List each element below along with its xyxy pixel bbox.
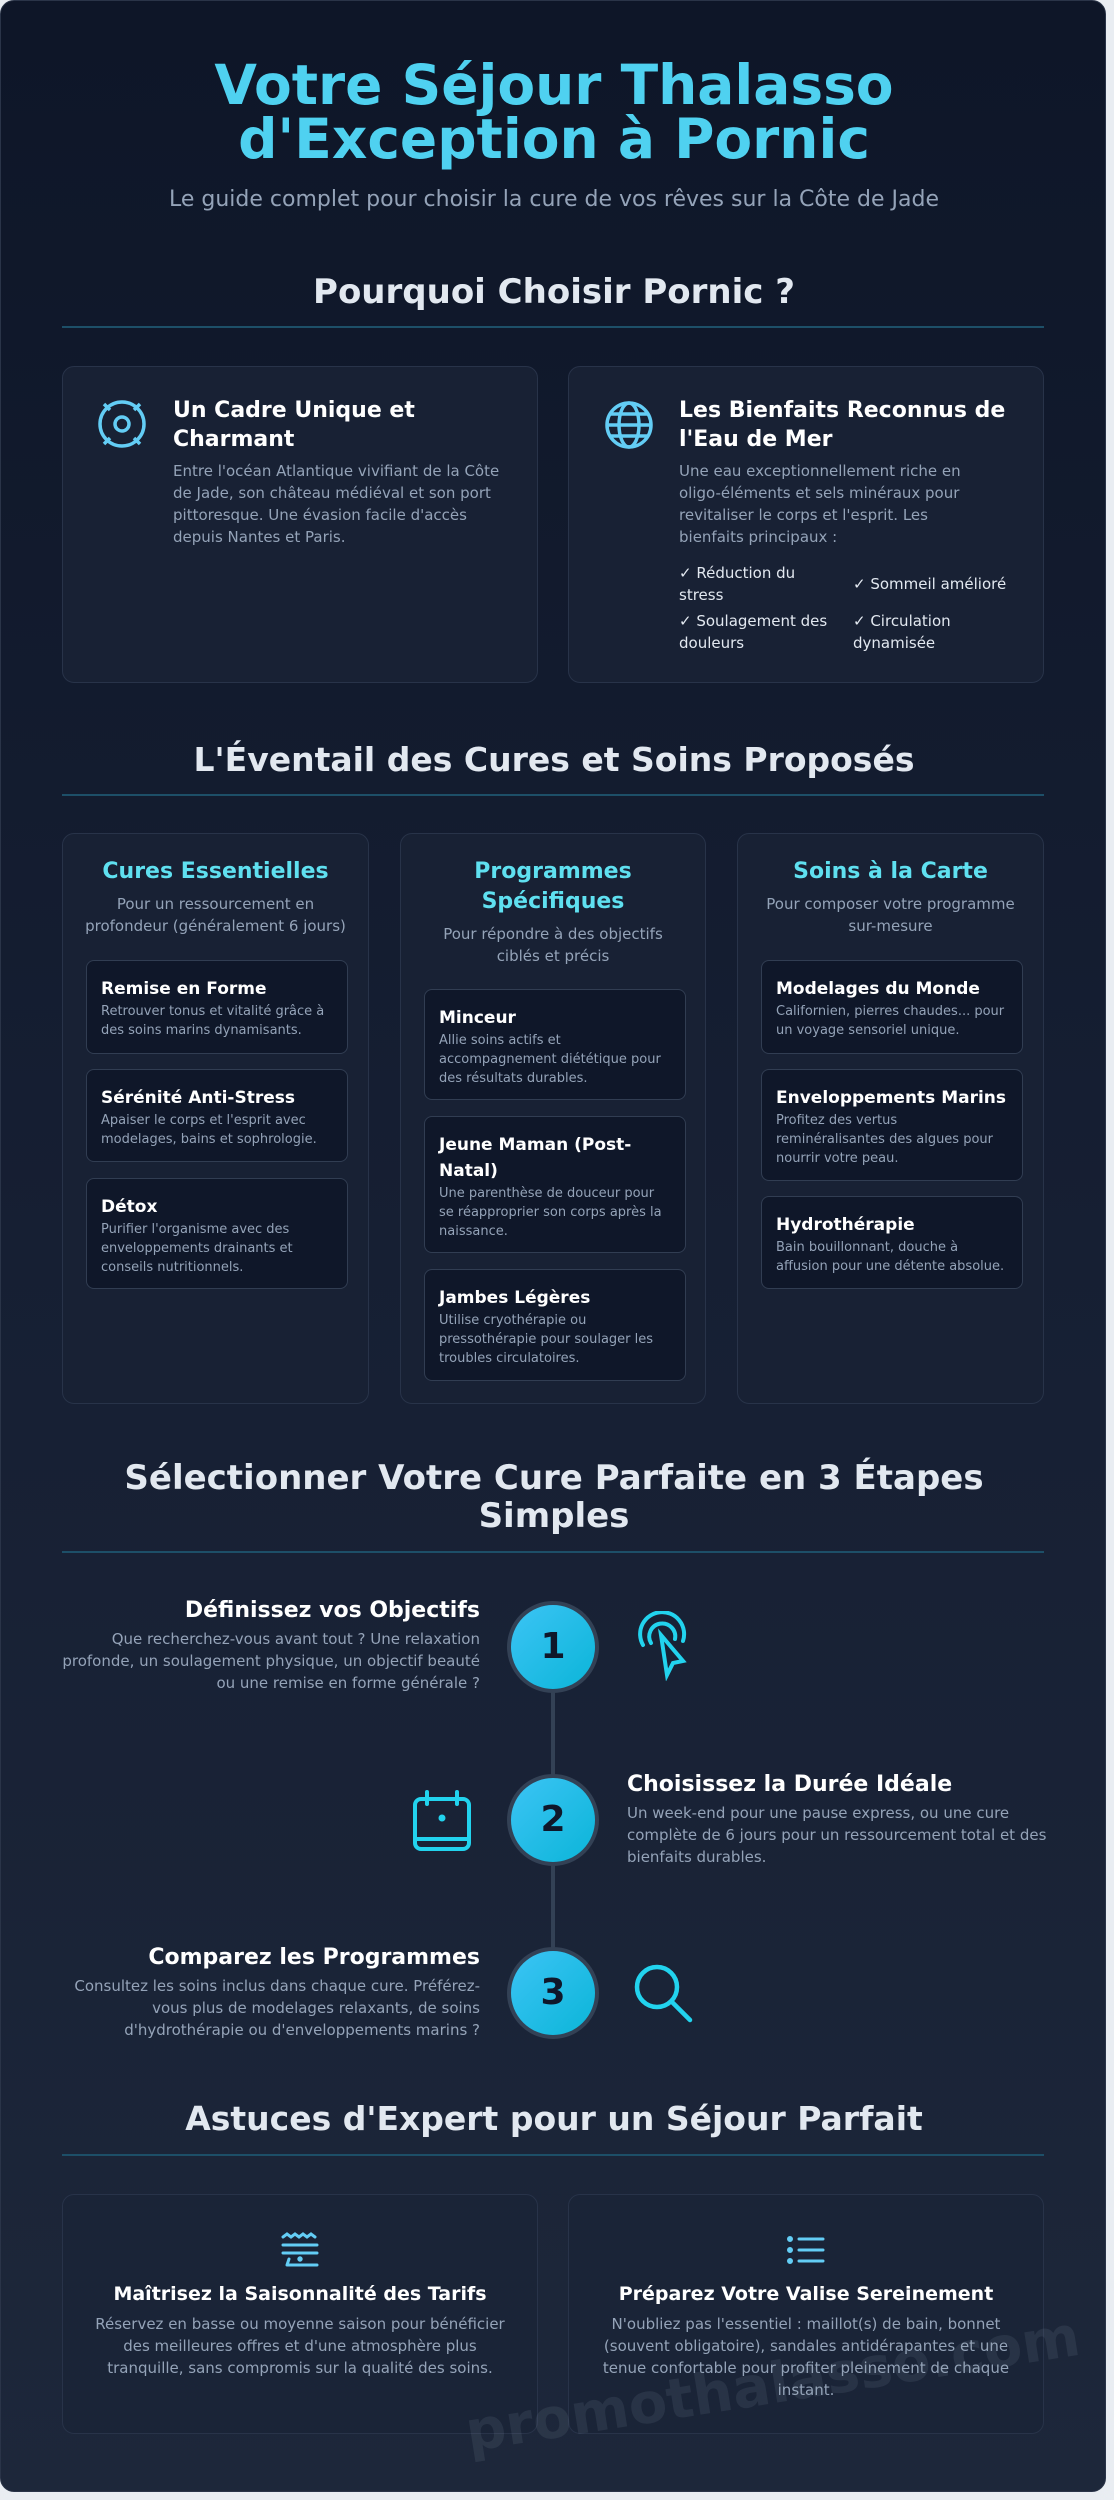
card: minceur: Minceur: [439, 1008, 516, 1028]
circle 3: 3: [540, 1972, 566, 2013]
icon: search: [634, 1964, 692, 2022]
heading: Eventail: L'Éventail des Cures et Soins Proposés: [194, 740, 914, 779]
subtitle: Le guide complet pour choisir la cure de vos rêves sur la Côte de Jade: [169, 187, 939, 212]
text block: Une eau exceptionnellement riche en oligo-éléments et sels minéraux pour revitaliser le corps et l'esprit. Les bienfaits principaux :: [679, 462, 961, 546]
icon: calendar: [413, 1790, 471, 1851]
icon: target: [98, 400, 146, 448]
card: remise en forme: Retrouver tonus et vitalité grâce à des soins marins dynamisants.: [101, 1004, 324, 1038]
panel: programmes specifiques: Programmes: [474, 859, 632, 884]
card: hydrotherapie: Hydrothérapie: [776, 1215, 915, 1235]
step 1: [62, 1598, 480, 1692]
step 2: Choisissez la Durée Idéale: [627, 1772, 952, 1797]
card: remise en forme: Remise en Forme: [101, 979, 267, 999]
title: [214, 53, 894, 171]
panel: bienfaits eau de mer: ✓ Réduction du stress: [679, 564, 795, 604]
circle 3: [507, 1947, 599, 2039]
panel: tip valise: [568, 2194, 1044, 2434]
card: jeune maman: Jeune Maman (Post-Natal): [439, 1135, 631, 1181]
step 2: [627, 1772, 1046, 1866]
card: remise en forme: [86, 960, 348, 1054]
icon: tariff: [281, 2232, 318, 2266]
panel: soins a la carte: Pour composer votre programme sur-mesure: [766, 895, 1015, 935]
step 3: Consultez les soins inclus dans chaque cure. Préférez-vous plus de modelages relaxants, de soins d'hydrothérapie ou d'enveloppements marins ?: [74, 1977, 480, 2039]
circle 1: 1: [540, 1626, 566, 1667]
card: modelages: [761, 960, 1023, 1054]
card: enveloppements: Profitez des vertus reminéralisantes des algues pour nourrir votre peau.: [776, 1113, 993, 1166]
card: jambes legeres: Utilise cryothérapie ou pressothérapie pour soulager les troubles circulatoires.: [439, 1313, 653, 1366]
step 1: Que recherchez-vous avant tout ? Une relaxation profonde, un soulagement physique, un objectif beauté ou une remise en forme générale ?: [62, 1630, 480, 1692]
panel: bienfaits eau de mer: ✓ Soulagement des douleurs: [679, 612, 827, 652]
checklist: [679, 564, 1006, 652]
text block: [679, 398, 1005, 546]
circle 1: [507, 1601, 599, 1693]
card: jeune maman: [424, 1116, 686, 1253]
panel: tip valise: N'oubliez pas l'essentiel : maillot(s) de bain, bonnet (souvent obligatoire), sandales antidérapantes et une tenue confortable pour profiter pleinement de chaque instant.: [603, 2315, 1009, 2399]
title: Votre Séjour Thalasso: [214, 53, 894, 117]
panel: bienfaits eau de mer: [568, 366, 1044, 683]
card: detox: Détox: [101, 1197, 157, 1217]
card: modelages: Modelages du Monde: [776, 979, 980, 999]
card: minceur: Allie soins actifs et accompagnement diététique pour des résultats durables.: [439, 1033, 661, 1086]
card: detox: [86, 1178, 348, 1289]
panel: programmes specifiques: [400, 833, 706, 1404]
icon: list: [787, 2236, 824, 2264]
watermark: promothalasso.com: [461, 2304, 1084, 2465]
heading: Pourquoi: Pourquoi Choisir Pornic ?: [313, 272, 795, 312]
card: jeune maman: Une parenthèse de douceur pour se réapproprier son corps après la naissance.: [439, 1186, 662, 1239]
panel: bienfaits eau de mer: ✓ Sommeil amélioré: [853, 575, 1006, 593]
panel: cadre unique: [62, 366, 538, 683]
heading: 3 etapes: [124, 1458, 984, 1536]
text block: Un Cadre Unique et Charmant: [173, 398, 415, 452]
panel: soins a la carte: Soins à la Carte: [793, 859, 988, 884]
step 3: [74, 1945, 480, 2039]
panel: cures essentielles: Cures Essentielles: [102, 859, 329, 884]
panel: programmes specifiques: Pour répondre à des objectifs ciblés et précis: [443, 925, 663, 965]
heading: 3 etapes: Simples: [479, 1496, 629, 1536]
panel: soins a la carte: [737, 833, 1044, 1404]
card: serenite: Sérénité Anti-Stress: [101, 1088, 295, 1108]
card: minceur: [424, 989, 686, 1100]
heading: astuces: Astuces d'Expert pour un Séjour Parfait: [185, 2099, 923, 2138]
circle 2: 2: [540, 1799, 566, 1840]
text block: Les Bienfaits Reconnus de l'Eau de Mer: [679, 398, 1005, 452]
step 3: Comparez les Programmes: [148, 1945, 480, 1970]
panel: tip saisonnalite: [62, 2194, 538, 2434]
card: enveloppements: Enveloppements Marins: [776, 1088, 1006, 1108]
title: d'Exception à Pornic: [238, 107, 870, 171]
panel: cures essentielles: Pour un ressourcement en profondeur (généralement 6 jours): [85, 895, 346, 935]
icon: globe: [605, 401, 653, 449]
card: hydrotherapie: Bain bouillonnant, douche à affusion pour une détente absolue.: [776, 1240, 1004, 1274]
step 2: Un week-end pour une pause express, ou une cure complète de 6 jours pour un ressourcement total et des bienfaits durables.: [627, 1804, 1046, 1866]
text block: [173, 398, 499, 546]
panel: programmes specifiques: Spécifiques: [482, 889, 624, 914]
step 1: Définissez vos Objectifs: [185, 1598, 480, 1623]
card: enveloppements: [761, 1069, 1023, 1181]
panel: tip valise: Préparez Votre Valise Sereinement: [619, 2283, 993, 2305]
card: jambes legeres: [424, 1269, 686, 1381]
panel: bienfaits eau de mer: ✓ Circulation dynamisée: [853, 612, 951, 652]
card: serenite: Apaiser le corps et l'esprit avec modelages, bains et sophrologie.: [101, 1113, 317, 1147]
card: modelages: Californien, pierres chaudes... pour un voyage sensoriel unique.: [776, 1004, 1004, 1038]
card: detox: Purifier l'organisme avec des enveloppements drainants et conseils nutritionnels.: [101, 1222, 293, 1275]
panel: tip saisonnalite: Réservez en basse ou moyenne saison pour bénéficier des meilleures offres et d'une atmosphère plus tranquille, sans compromis sur la qualité des soins.: [95, 2315, 505, 2377]
icon: pointer click: [638, 1611, 687, 1681]
text block: Entre l'océan Atlantique vivifiant de la Côte de Jade, son château médiéval et son port pittoresque. Une évasion facile d'accès depuis Nantes et Paris.: [173, 462, 499, 546]
card: hydrotherapie: [761, 1196, 1023, 1289]
panel: tip saisonnalite: Maîtrisez la Saisonnalité des Tarifs: [113, 2283, 487, 2305]
panel: cures essentielles: [62, 833, 369, 1404]
heading: 3 etapes: Sélectionner Votre Cure Parfaite en 3 Étapes: [124, 1458, 984, 1498]
card: jambes legeres: Jambes Légères: [439, 1288, 590, 1308]
timeline line: [551, 1691, 555, 1951]
card: serenite: [86, 1069, 348, 1162]
circle 2: [507, 1774, 599, 1866]
